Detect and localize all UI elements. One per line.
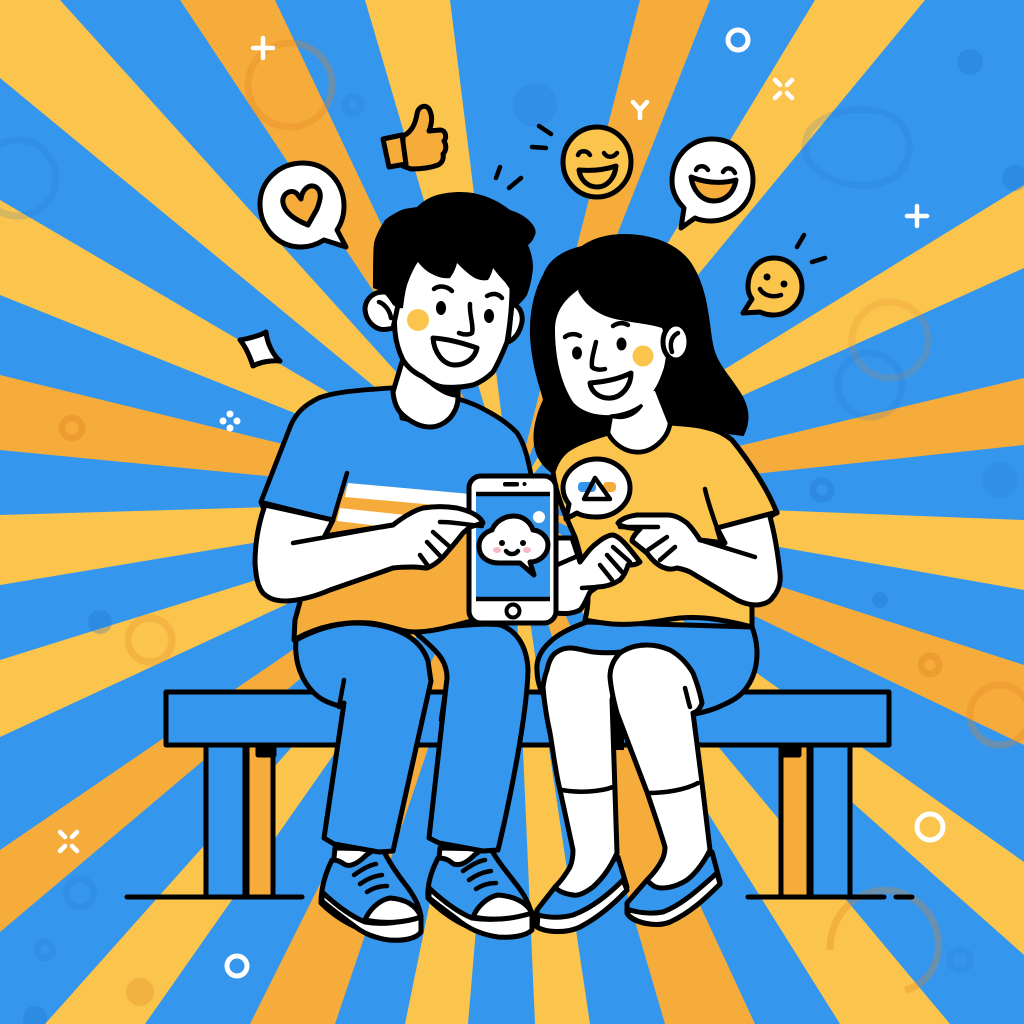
white sparkles and rings (60, 30, 943, 976)
woman skirt (537, 622, 757, 714)
shirt chat bubble (563, 459, 630, 519)
icon: small smile bubble (743, 258, 802, 315)
icon: heart speech bubble (260, 163, 346, 247)
man pants left leg (296, 623, 431, 852)
man shoes (321, 847, 532, 940)
woman neck (608, 390, 670, 452)
man left ear (365, 292, 398, 330)
man pants right leg (416, 624, 528, 851)
man right ear (508, 304, 522, 342)
man leg inner seam (339, 680, 447, 720)
man chin shadow (422, 377, 458, 398)
icon: laughing speech bubble (672, 139, 753, 228)
man hair (373, 192, 536, 308)
man shirt (261, 388, 532, 640)
phone (469, 476, 556, 623)
woman legs (543, 645, 710, 895)
icon: emphasis ticks (496, 126, 825, 262)
man arm and pointing hand (255, 505, 483, 601)
phone screen cloud (479, 516, 548, 575)
man neck (393, 362, 458, 427)
woman sleeve line (705, 489, 725, 543)
woman right arm and hand (618, 512, 780, 605)
ground lines (127, 894, 912, 900)
man (255, 192, 556, 940)
man cheek (407, 309, 429, 331)
woman (531, 235, 780, 932)
woman hair (531, 235, 748, 473)
icon: laughing yellow face (563, 127, 631, 197)
man eyes (436, 301, 446, 315)
icon: thumbs up (383, 106, 446, 169)
bench legs (206, 744, 850, 897)
man brows (434, 287, 502, 298)
man mouth (433, 338, 477, 365)
woman shirt (553, 423, 777, 627)
bench seat (166, 692, 889, 745)
bench (127, 692, 912, 897)
icon: white diamond sparkle (240, 332, 280, 366)
man sleeve line (261, 473, 347, 520)
woman left arm and hand (550, 535, 640, 614)
man nose (459, 304, 472, 334)
woman shoes (537, 852, 720, 932)
man head (365, 192, 536, 398)
woman face (555, 260, 700, 418)
man face (393, 240, 512, 387)
